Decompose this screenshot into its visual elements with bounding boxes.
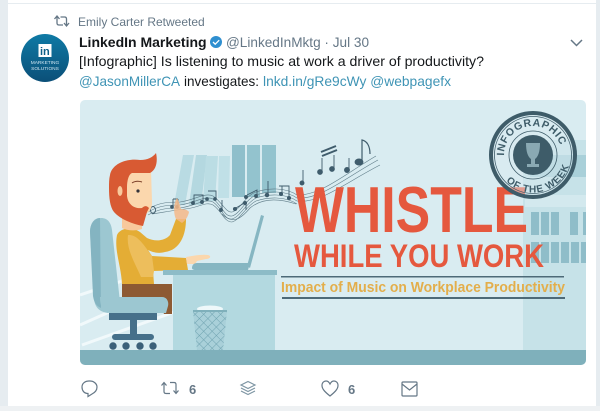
icon: mail	[402, 382, 417, 396]
trophy icon	[526, 143, 540, 167]
card background	[80, 100, 586, 365]
tagline band: Impact of Music on Workplace Productivity	[281, 279, 566, 296]
retweet context line: Emily Carter Retweeted	[78, 15, 205, 29]
tweet header: @LinkedInMktg · Jul 30	[226, 34, 369, 50]
tweet text: [Infographic] Is listening to music at work a driver of productivity?	[79, 53, 484, 69]
right shelves	[523, 140, 586, 350]
avatar: LinkedIn Marketing Solutions: in	[40, 46, 50, 58]
torso and arms	[116, 219, 188, 284]
reply and like counts: 6	[348, 382, 355, 397]
reply and like counts	[189, 382, 355, 397]
folders on the wall	[174, 145, 276, 205]
chair seat and base	[100, 297, 168, 350]
icon: reply	[82, 381, 97, 396]
neck	[122, 218, 142, 230]
infographic image card	[80, 100, 586, 365]
icon: heart	[322, 381, 338, 396]
icon: tweet menu chevron	[571, 40, 582, 46]
hands	[186, 255, 210, 264]
music staff flowing between character and title	[148, 156, 380, 222]
tweet text	[79, 53, 484, 89]
background floor lines	[80, 280, 180, 345]
action bar	[82, 381, 417, 396]
title: WHISTLE: WHISTLE	[295, 173, 528, 246]
tweet text: lnkd.in/gRe9cWy @webpagefx	[263, 73, 451, 89]
avatar: LinkedIn Marketing Solutions: SOLUTIONS	[31, 66, 59, 72]
character	[90, 153, 210, 350]
stamp: Infographic of the week	[489, 111, 577, 199]
tweet text: investigates:	[184, 73, 259, 89]
tweet header: LinkedIn Marketing	[79, 34, 207, 50]
desk	[163, 270, 277, 350]
chair back	[90, 218, 120, 313]
stamp: Infographic of the week: INFOGRAPHIC	[496, 119, 566, 155]
face	[127, 172, 152, 214]
hair and beard	[109, 153, 157, 226]
laptop	[192, 215, 264, 270]
floor strip	[80, 350, 586, 365]
icon: retweet	[162, 382, 178, 394]
tweet text: @JasonMillerCA	[79, 73, 181, 89]
legs	[122, 284, 172, 314]
stamp: Infographic of the week: OF THE WEEK	[507, 164, 569, 192]
avatar: LinkedIn Marketing Solutions	[21, 34, 69, 82]
reply and like counts: 6	[189, 382, 196, 397]
avatar: LinkedIn Marketing Solutions: MARKETING	[31, 60, 60, 66]
icon: layers	[241, 382, 255, 394]
subtitle: WHILE YOU WORK: WHILE YOU WORK	[294, 238, 544, 274]
waste bin	[193, 306, 227, 350]
tweet header	[79, 34, 369, 50]
music notes	[150, 140, 370, 214]
